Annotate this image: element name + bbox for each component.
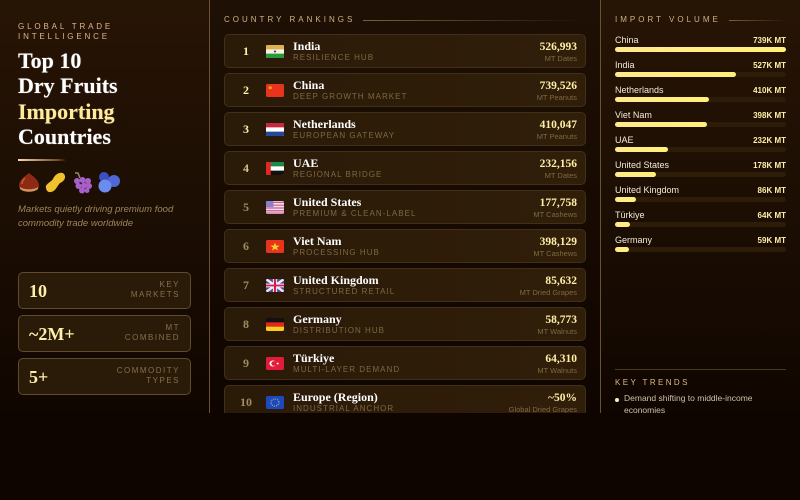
eyebrow label: GLOBAL TRADE bbox=[18, 22, 113, 31]
row: Germany: 58,773 bbox=[545, 314, 577, 326]
stat card: key markets: KEY bbox=[159, 280, 180, 289]
bar: United Kingdom: 86K MT bbox=[758, 186, 786, 195]
row: China bbox=[224, 73, 586, 107]
bar: China: China bbox=[615, 35, 639, 45]
row: India bbox=[224, 34, 586, 68]
row: Türkiye: 9 bbox=[243, 356, 249, 370]
row: Viet Nam: Viet Nam bbox=[293, 234, 342, 248]
title: Importing bbox=[18, 99, 115, 124]
bar: Türkiye: Türkiye bbox=[615, 210, 645, 220]
stat card: combined volume: MT bbox=[165, 323, 180, 332]
bar: Viet Nam: 398K MT bbox=[753, 111, 786, 120]
trend item: economies bbox=[624, 405, 665, 415]
bar: United States: 178K MT bbox=[753, 161, 786, 170]
bar: UAE: UAE bbox=[615, 135, 634, 145]
rankings clip bbox=[224, 34, 586, 413]
row: UAE: MT Dates bbox=[545, 171, 577, 180]
panel: left sidebar bbox=[0, 0, 210, 413]
row: Europe: INDUSTRIAL ANCHOR bbox=[293, 404, 394, 413]
bar: UAE: 232K MT bbox=[753, 136, 786, 145]
row: Europe: ~50% bbox=[548, 392, 577, 404]
eyebrow label: INTELLIGENCE bbox=[18, 32, 110, 41]
row: Germany: DISTRIBUTION HUB bbox=[293, 326, 385, 335]
heading: import volume: IMPORT VOLUME bbox=[615, 15, 721, 24]
row: India: RESILIENCE HUB bbox=[293, 53, 374, 62]
row: United States: MT Cashews bbox=[533, 210, 577, 219]
bar: Germany: 59K MT bbox=[758, 236, 786, 245]
row: Türkiye: MULTI-LAYER DEMAND bbox=[293, 365, 400, 374]
row: China: 739,526 bbox=[540, 80, 577, 92]
row: China: 2 bbox=[243, 83, 249, 97]
row: Netherlands: EUROPEAN GATEWAY bbox=[293, 131, 395, 140]
panel: country rankings bbox=[210, 0, 600, 413]
row: China: China bbox=[293, 78, 324, 92]
row: UAE: UAE bbox=[293, 156, 318, 170]
row: Viet Nam: 6 bbox=[243, 239, 249, 253]
heading: country rankings: COUNTRY RANKINGS bbox=[224, 15, 355, 24]
row: United Kingdom bbox=[224, 268, 586, 302]
heading: key trends: KEY TRENDS bbox=[615, 378, 690, 387]
bar: Netherlands: 410K MT bbox=[753, 86, 786, 95]
row: Germany bbox=[224, 307, 586, 341]
row: Viet Nam: PROCESSING HUB bbox=[293, 248, 380, 257]
row: Viet Nam: 398,129 bbox=[540, 236, 577, 248]
stat card: commodity types bbox=[18, 358, 191, 395]
row: Europe: Europe (Region) bbox=[293, 390, 378, 404]
icon row: dry fruits bbox=[19, 172, 120, 194]
stat card: commodity types: 5+ bbox=[29, 367, 48, 387]
bar: Türkiye bbox=[615, 210, 786, 227]
row: Viet Nam: MT Cashews bbox=[533, 249, 577, 258]
row: India: MT Dates bbox=[545, 54, 577, 63]
icon: peanut bbox=[46, 173, 65, 192]
bar: China: 739K MT bbox=[753, 36, 786, 45]
stat card: key markets bbox=[18, 272, 191, 309]
row: Germany: MT Walnuts bbox=[537, 327, 577, 336]
icon: blueberries bbox=[98, 172, 120, 192]
bar: United States: United States bbox=[615, 160, 669, 170]
trend item bbox=[615, 393, 753, 415]
bar: Türkiye: 64K MT bbox=[758, 211, 786, 220]
row: Netherlands: MT Peanuts bbox=[537, 132, 577, 141]
row: United Kingdom: STRUCTURED RETAIL bbox=[293, 287, 395, 296]
row: UAE: 232,156 bbox=[540, 158, 577, 170]
icon: grapes bbox=[74, 173, 92, 194]
title divider bbox=[18, 159, 66, 161]
row: United States: United States bbox=[293, 195, 361, 209]
subtitle: commodity trade worldwide bbox=[18, 218, 133, 229]
bar: India: 527K MT bbox=[753, 61, 786, 70]
stat card: combined volume: COMBINED bbox=[125, 333, 180, 342]
stat card: commodity types: TYPES bbox=[146, 376, 180, 385]
bar: United Kingdom: United Kingdom bbox=[615, 185, 679, 195]
title: Top 10 bbox=[18, 48, 81, 73]
stat card: key markets: MARKETS bbox=[131, 290, 180, 299]
bar: Viet Nam: Viet Nam bbox=[615, 110, 652, 120]
title bbox=[18, 48, 118, 149]
icon: chestnut bbox=[19, 173, 39, 192]
bar: Viet Nam bbox=[615, 110, 786, 127]
bar: United States bbox=[615, 160, 786, 177]
panel: right sidebar bbox=[600, 0, 800, 413]
eyebrow label bbox=[18, 22, 113, 41]
row: Viet Nam bbox=[224, 229, 586, 263]
row: United Kingdom: 85,632 bbox=[545, 275, 577, 287]
stat card: combined volume bbox=[18, 315, 191, 352]
bar: India bbox=[615, 60, 786, 77]
row: Türkiye: MT Walnuts bbox=[537, 366, 577, 375]
row: UAE: 4 bbox=[243, 161, 249, 175]
row: UAE: REGIONAL BRIDGE bbox=[293, 170, 382, 179]
title: Countries bbox=[18, 124, 111, 149]
row: Netherlands bbox=[224, 112, 586, 146]
row: Europe bbox=[224, 385, 586, 419]
row: Germany: Germany bbox=[293, 312, 342, 326]
bar: United Kingdom bbox=[615, 185, 786, 202]
row: Türkiye bbox=[224, 346, 586, 380]
row: China: DEEP GROWTH MARKET bbox=[293, 92, 407, 101]
row: Türkiye: 64,310 bbox=[545, 353, 577, 365]
bar: Netherlands bbox=[615, 85, 786, 102]
bar: Germany bbox=[615, 235, 786, 252]
row: India: India bbox=[293, 39, 320, 53]
bar: UAE bbox=[615, 135, 786, 152]
row: Türkiye: Türkiye bbox=[293, 351, 334, 365]
row: United Kingdom: 7 bbox=[243, 278, 249, 292]
row: United States: 5 bbox=[243, 200, 249, 214]
row: India: 1 bbox=[243, 44, 249, 58]
title: Dry Fruits bbox=[18, 73, 118, 98]
trend item: Demand shifting to middle-income bbox=[624, 393, 753, 403]
row: United States bbox=[224, 190, 586, 224]
bar: Netherlands: Netherlands bbox=[615, 85, 664, 95]
row: UAE bbox=[224, 151, 586, 185]
bar: China bbox=[615, 35, 786, 52]
subtitle bbox=[18, 204, 174, 229]
stat card: key markets: 10 bbox=[29, 281, 47, 301]
bar: Germany: Germany bbox=[615, 235, 652, 245]
stat card: commodity types: COMMODITY bbox=[117, 366, 180, 375]
row: Netherlands: 410,047 bbox=[540, 119, 577, 131]
row: Germany: 8 bbox=[243, 317, 249, 331]
bar: India: India bbox=[615, 60, 635, 70]
row: United States: 177,758 bbox=[540, 197, 577, 209]
row: United Kingdom: United Kingdom bbox=[293, 273, 379, 287]
row: Netherlands: Netherlands bbox=[293, 117, 356, 131]
stat card: combined volume: ~2M+ bbox=[29, 324, 75, 344]
row: Europe: 10 bbox=[240, 395, 252, 409]
row: India: 526,993 bbox=[540, 41, 577, 53]
subtitle: Markets quietly driving premium food bbox=[18, 204, 173, 215]
row: United States: PREMIUM & CLEAN-LABEL bbox=[293, 209, 416, 218]
row: United Kingdom: MT Dried Grapes bbox=[520, 288, 577, 297]
row: China: MT Peanuts bbox=[537, 93, 577, 102]
row: Netherlands: 3 bbox=[243, 122, 249, 136]
